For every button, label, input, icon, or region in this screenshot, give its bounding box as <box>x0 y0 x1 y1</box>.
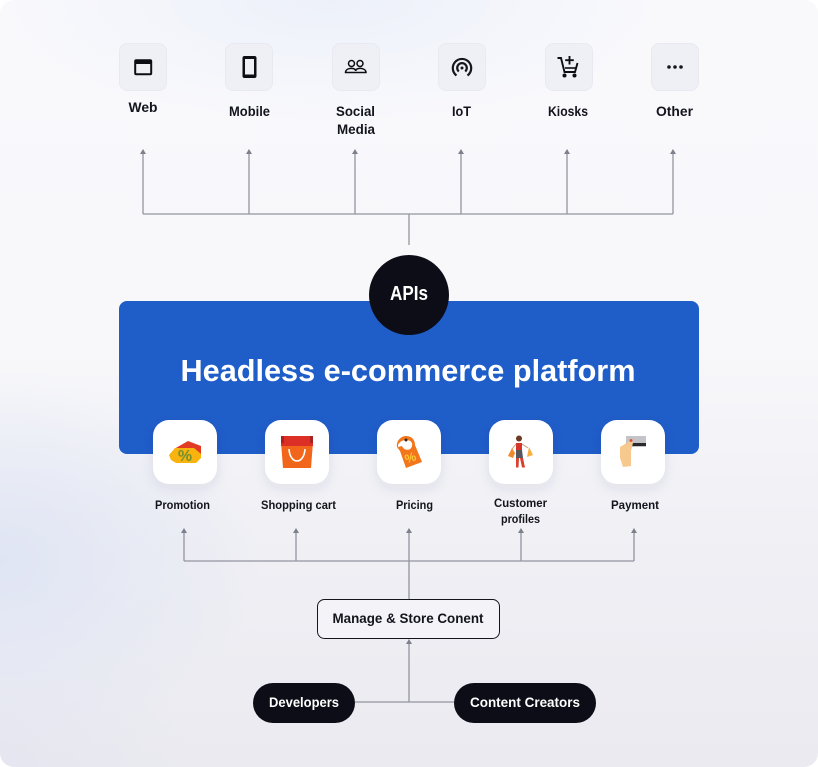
icon: dots <box>667 65 683 69</box>
channel: Mobile <box>226 44 272 119</box>
pill: Developers <box>253 683 355 723</box>
icon: discount tag: % <box>178 448 192 465</box>
box: Manage & Store Conent: Manage & Store Conent <box>332 610 484 626</box>
label: Shopping cart: Shopping cart <box>261 500 336 512</box>
box: Manage & Store Conent <box>318 600 500 638</box>
label: Other: Other <box>656 104 694 119</box>
icon: hand with card <box>620 436 646 467</box>
label: Customer profiles: profiles <box>501 514 540 526</box>
label: Pricing: Pricing <box>396 500 433 512</box>
pill: Developers: Developers <box>269 694 339 710</box>
icon: browser window <box>135 60 152 74</box>
capability: Pricing <box>377 420 441 512</box>
panel: platform <box>119 301 699 454</box>
icon: shopper <box>508 436 533 468</box>
label: Social Media: Media <box>337 122 375 137</box>
channel: IoT <box>438 44 486 119</box>
pill: Content Creators <box>454 683 596 723</box>
connector: content to capabilities <box>181 528 637 599</box>
label: Social Media: Social <box>336 104 375 119</box>
pill: Content Creators: Content Creators <box>470 694 580 710</box>
capability: Customer profiles <box>489 420 553 526</box>
icon: price tag: % <box>403 450 418 466</box>
icon: signal <box>453 59 471 76</box>
badge: APIs: APIs <box>390 283 428 305</box>
channel: Web <box>120 44 166 115</box>
capability: Promotion <box>153 420 217 512</box>
label: Payment: Payment <box>611 500 659 512</box>
channel: Social Media <box>332 44 380 137</box>
label: IoT: IoT <box>452 104 472 119</box>
connector: APIs to channels <box>140 149 676 245</box>
label: Customer profiles: Customer <box>494 498 548 510</box>
capability: Payment <box>601 420 665 512</box>
channel: Kiosks <box>546 44 592 119</box>
capability: Shopping cart <box>261 420 336 512</box>
label: Kiosks: Kiosks <box>548 104 588 119</box>
badge: APIs <box>369 255 449 335</box>
label: Mobile: Mobile <box>229 104 270 119</box>
label: Social Media <box>336 104 375 137</box>
label: Promotion: Promotion <box>155 500 210 512</box>
icon: phone <box>242 56 256 78</box>
icon: cart with plus <box>558 56 578 78</box>
label: Web: Web <box>128 100 158 115</box>
icon: people <box>346 60 366 72</box>
channel: Other <box>652 44 698 119</box>
connector: contributors to content <box>355 639 454 702</box>
label: Customer profiles <box>494 498 548 526</box>
title: Headless e-commerce platform <box>180 353 636 388</box>
icon: shopping bag <box>281 436 313 468</box>
